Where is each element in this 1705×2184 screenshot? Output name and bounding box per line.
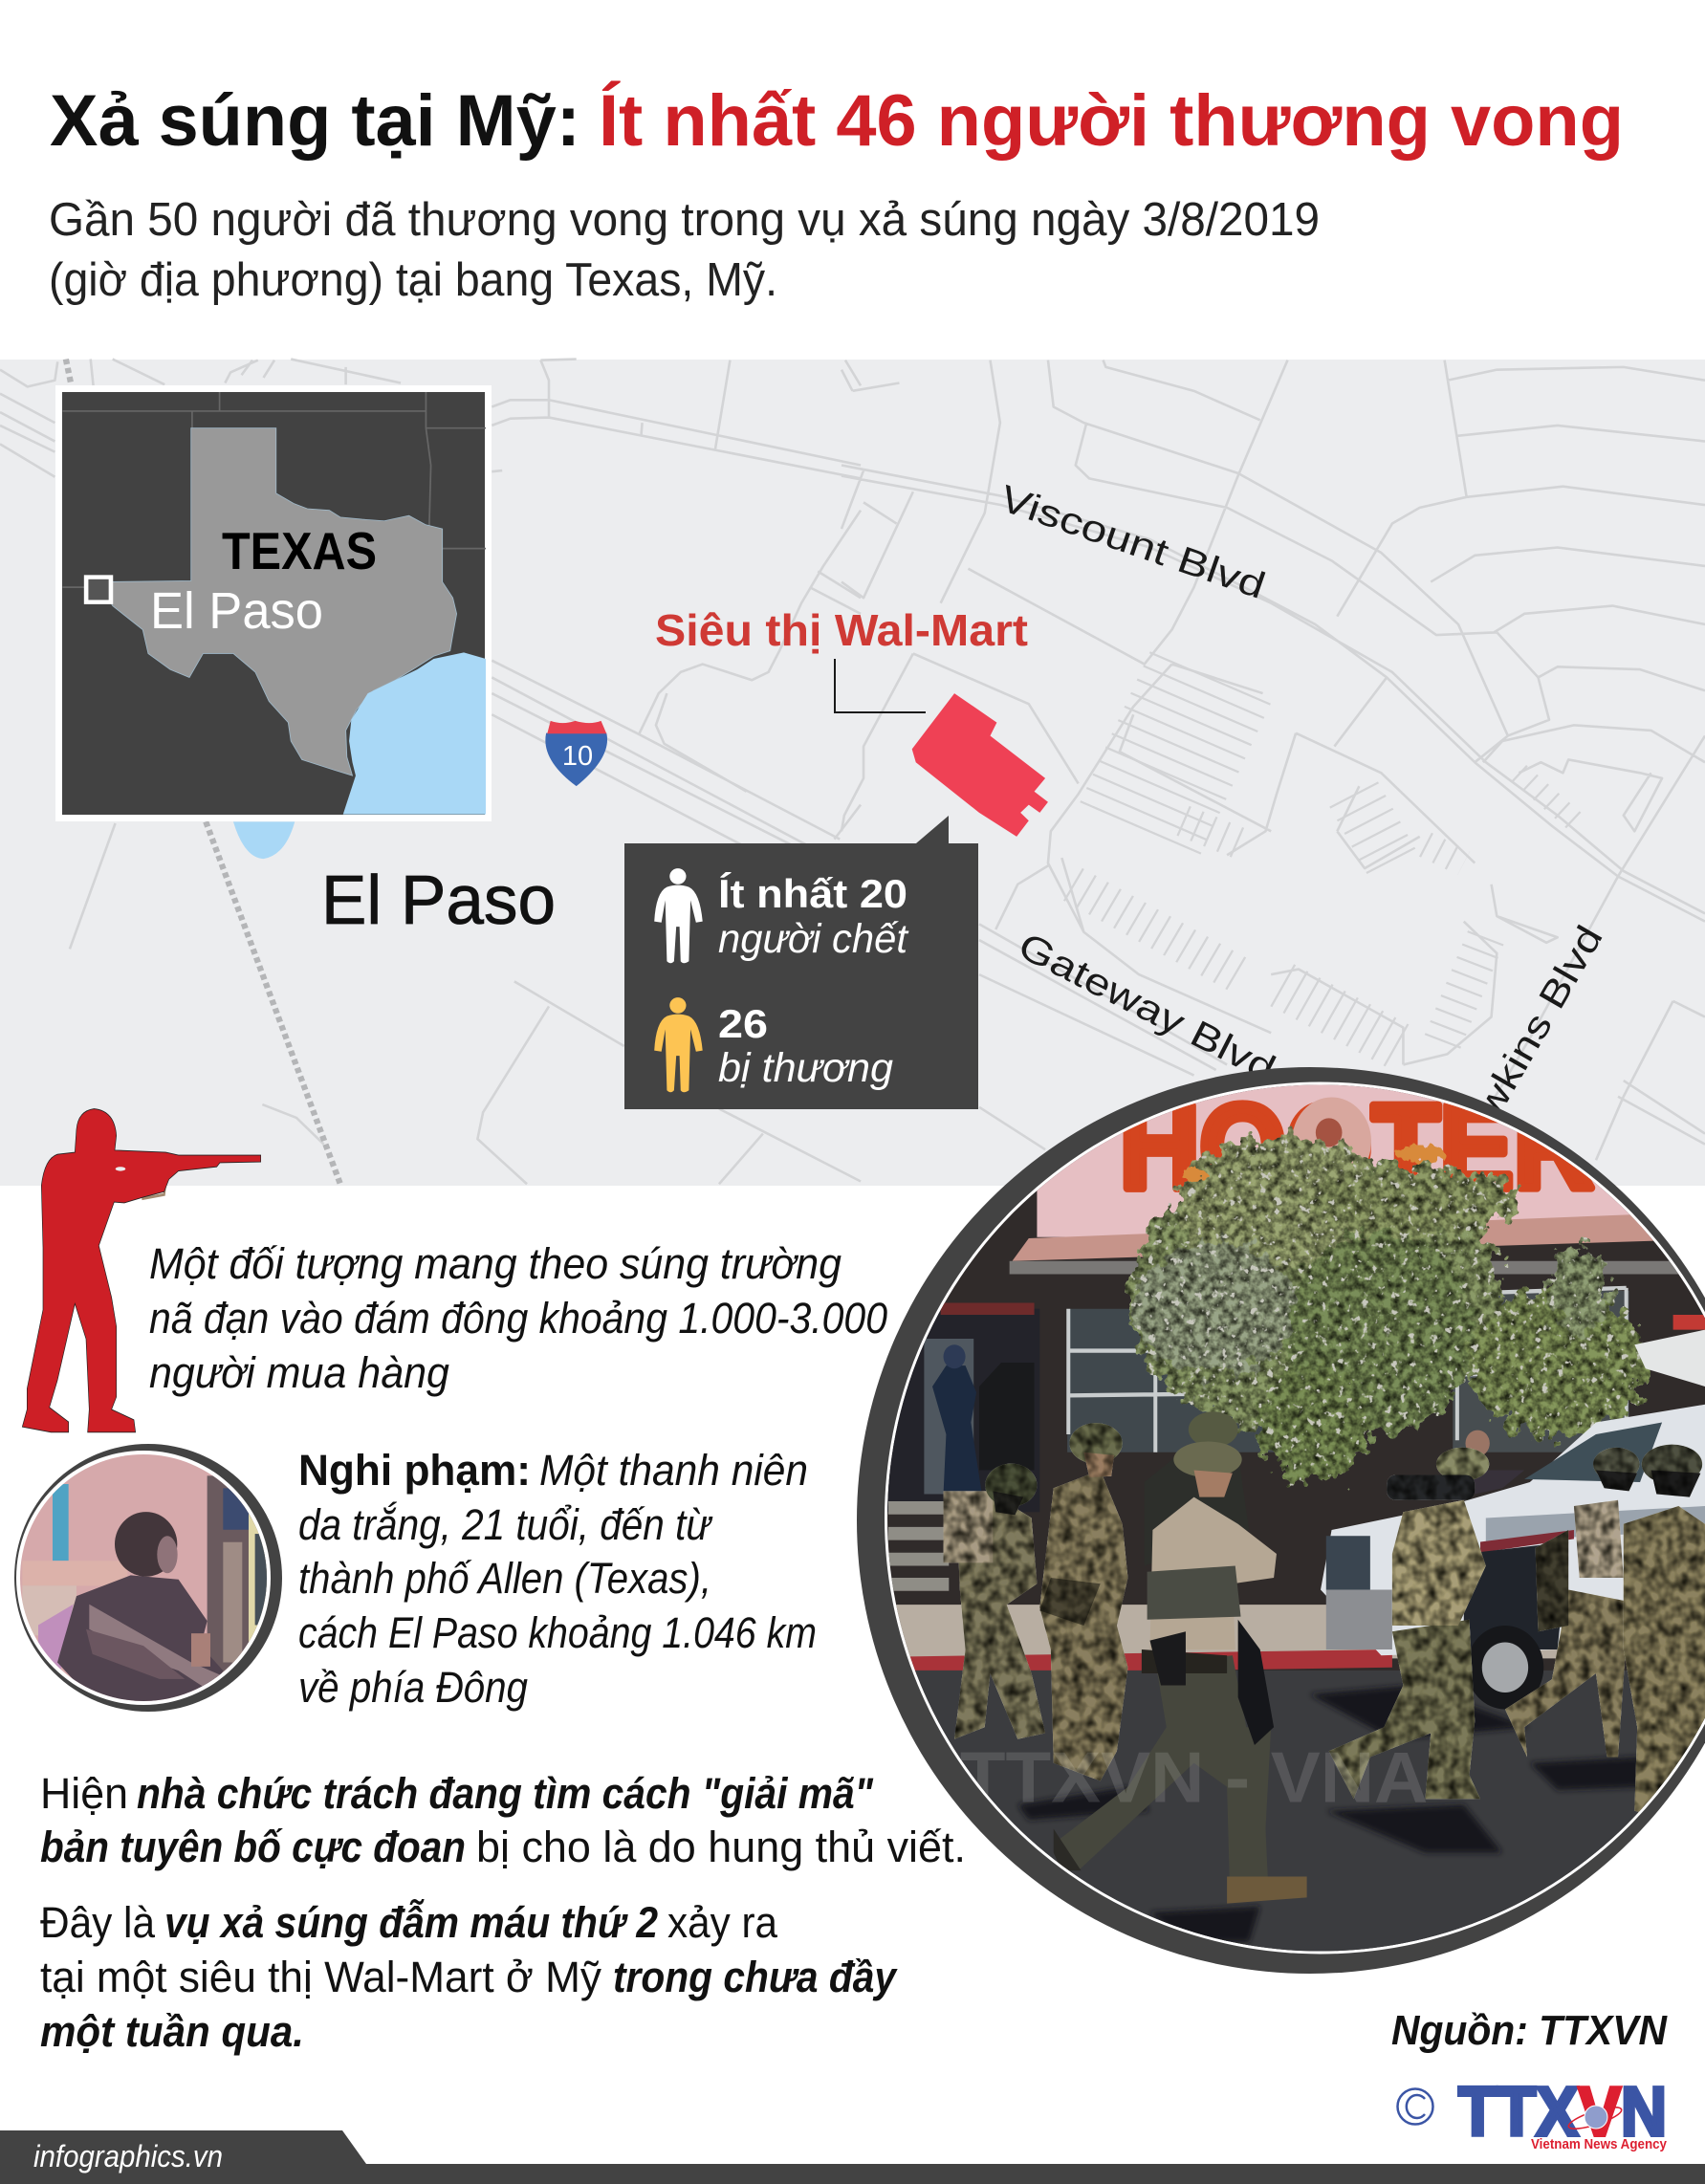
text block: suspect: da trắng, 21 tuổi, đến từ bbox=[298, 1500, 713, 1549]
text block: second shooting: trong chưa đầy bbox=[613, 1953, 898, 2001]
icon: interstate 10 shield: 10 bbox=[562, 741, 593, 772]
subtitle: Gần 50 người đã thương vong trong vụ xả súng ngày 3/8/2019 bbox=[49, 194, 1320, 246]
soldier far right 1 bbox=[1505, 1448, 1639, 1758]
left doors bbox=[885, 1309, 1039, 1512]
text block: manifesto bbox=[40, 1769, 966, 1871]
panel: street map bbox=[0, 360, 1705, 1186]
soldier center bbox=[1054, 1442, 1307, 1904]
title: Xả súng tại Mỹ: bbox=[50, 80, 580, 162]
storefront sign: HOOTERS bbox=[1120, 1081, 1668, 1214]
road label: Hawkins Blvd: Hawkins Blvd bbox=[1439, 919, 1611, 1175]
icon: person dead bbox=[654, 868, 703, 963]
backdrop bbox=[887, 1084, 1705, 1951]
sidewalk and curb bbox=[896, 1605, 1557, 1658]
soldier 1 bbox=[944, 1464, 1045, 1739]
roads east bbox=[842, 360, 1705, 1160]
main tree bbox=[1127, 1136, 1646, 1482]
text block: shooter: nã đạn vào đám đông khoảng 1.000-3.000 bbox=[149, 1294, 887, 1343]
stat: injured bbox=[718, 1001, 893, 1091]
text block: second shooting: vụ xả súng đẫm máu thứ 2 bbox=[164, 1898, 658, 1947]
text block: manifesto: Hiện bbox=[40, 1769, 128, 1818]
text block: suspect: cách El Paso khoảng 1.046 km bbox=[298, 1608, 817, 1657]
text block: suspect: thành phố Allen (Texas), bbox=[298, 1554, 711, 1603]
inset label: Texas: TEXAS bbox=[222, 521, 377, 580]
soldier right bbox=[1329, 1448, 1489, 1799]
text block: second shooting: một tuần qua. bbox=[40, 2007, 304, 2056]
text block: shooter: Một đối tượng mang theo súng trường bbox=[149, 1239, 842, 1288]
icon: person injured bbox=[654, 997, 703, 1092]
truck bbox=[1321, 1405, 1705, 1655]
inset map: Texas bbox=[55, 385, 492, 821]
map label: El Paso: El Paso bbox=[321, 863, 556, 939]
text block: suspect: Một thanh niên bbox=[539, 1446, 808, 1495]
road label: Viscount Blvd: Viscount Blvd bbox=[995, 478, 1270, 607]
footer text: infographics.vn bbox=[33, 2139, 223, 2173]
icon: copyright bbox=[1398, 2088, 1432, 2125]
stat: deaths: Ít nhất 20 bbox=[718, 871, 907, 916]
source: Nguồn: TTXVN bbox=[1391, 2007, 1668, 2054]
inset label: El Paso: El Paso bbox=[150, 582, 323, 640]
icon: shooter silhouette bbox=[22, 1109, 261, 1432]
road bbox=[915, 1670, 1705, 1951]
Gulf of Mexico bbox=[343, 652, 486, 815]
text block: suspect: về phía Đông bbox=[298, 1663, 528, 1712]
watermark: TTXVN - VNA bbox=[960, 1738, 1428, 1818]
callout: casualties bbox=[624, 816, 978, 1109]
steps bbox=[888, 1501, 949, 1591]
icon: interstate 10 shield bbox=[545, 721, 607, 786]
logo: TTXVN: TTXVN bbox=[1458, 2074, 1667, 2151]
photo: police at scene bbox=[842, 1052, 1705, 2008]
text block: suspect: Nghi phạm: bbox=[298, 1446, 531, 1495]
text block: second shooting: Đây là bbox=[40, 1898, 156, 1947]
leader line bbox=[835, 659, 926, 712]
windows bbox=[1067, 1308, 1274, 1452]
stat: deaths bbox=[718, 871, 909, 962]
text block: manifesto: nhà chức trách đang tìm cách "giải mã" bbox=[137, 1769, 874, 1818]
soldier 3 back bbox=[1145, 1446, 1249, 1566]
subtitle bbox=[49, 194, 1320, 306]
text block: manifesto: bản tuyên bố cực đoan bbox=[40, 1823, 466, 1871]
text block: second shooting bbox=[40, 1898, 898, 2056]
text block: shooter: người mua hàng bbox=[149, 1348, 449, 1397]
title: Ít nhất 46 người thương vong bbox=[599, 80, 1624, 162]
text block: shooter bbox=[149, 1239, 887, 1397]
police van right bbox=[1634, 1330, 1705, 1387]
bystander bbox=[1470, 1471, 1524, 1494]
awning bbox=[1013, 1213, 1678, 1261]
subtitle: (giờ địa phương) tại bang Texas, Mỹ. bbox=[49, 254, 777, 306]
icon: Wal-Mart building bbox=[912, 693, 1048, 837]
text block: manifesto: bị cho là do hung thủ viết. bbox=[476, 1823, 966, 1871]
stat: injured: 26 bbox=[718, 1001, 768, 1046]
logo: TTXVN: Vietnam News Agency bbox=[1531, 2137, 1667, 2152]
text block: suspect bbox=[298, 1446, 817, 1712]
label: Wal-Mart: Siêu thị Wal-Mart bbox=[655, 605, 1028, 655]
stat: deaths: người chết bbox=[718, 916, 909, 962]
soldier far right 2 bbox=[1624, 1445, 1705, 1828]
stat: injured: bị thương bbox=[718, 1045, 893, 1091]
El Paso locator square bbox=[86, 578, 111, 602]
photo: suspect bbox=[14, 1444, 282, 1712]
title bbox=[50, 80, 1624, 162]
footer bar bbox=[0, 2130, 1705, 2184]
Texas shape bbox=[98, 428, 457, 775]
road label: Gateway Blvd: Gateway Blvd bbox=[1012, 926, 1281, 1090]
soldier 2 bbox=[1039, 1423, 1127, 1780]
roads west bbox=[0, 360, 861, 1184]
text block: second shooting: xảy ra bbox=[667, 1898, 778, 1947]
shadows bbox=[1017, 1685, 1646, 1942]
text block: second shooting: tại một siêu thị Wal-Mart ở Mỹ bbox=[40, 1953, 601, 2001]
